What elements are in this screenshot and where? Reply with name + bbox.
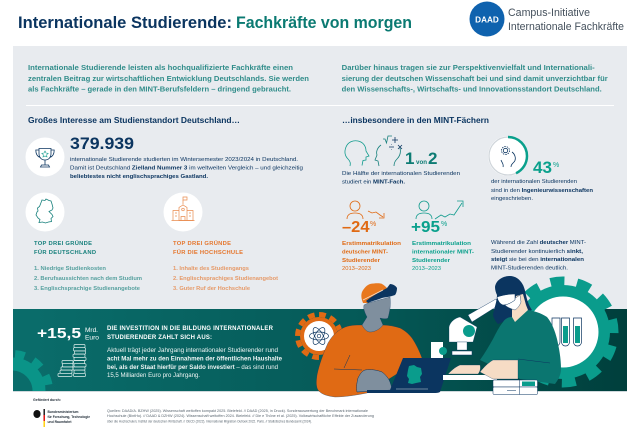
text: sources bbox=[107, 409, 374, 424]
stat: 1 von 2: von bbox=[416, 159, 427, 166]
text: sources: Quellen: DAAD/A. BZHW (2025). Wissenschaft weltoffen kompakt 2025. Bielefeld. // DAAD (2025, in Druck). Sonderauswertung der Benchmark internationale bbox=[107, 409, 368, 413]
stat: 379.939 bbox=[70, 135, 303, 180]
stat: plus 15.5 billion: Mrd. bbox=[85, 327, 98, 334]
illustration: man with laptop bbox=[316, 283, 451, 397]
stat: 379.939: 379.939 bbox=[70, 135, 134, 153]
DAAD logo: Campus-Initiative bbox=[508, 7, 590, 19]
text: international first-year students: Erstimmatrikulation bbox=[412, 241, 472, 247]
text: investment body: 15,5 Milliarden Euro pro Jahrgang. bbox=[107, 373, 200, 379]
text: top reasons for the university: FÜR DIE HOCHSCHULE bbox=[173, 249, 243, 256]
text: German first-year students bbox=[342, 241, 402, 272]
stat: 1 von 2: 1 bbox=[405, 149, 414, 168]
intro text right bbox=[342, 63, 608, 94]
text: investment body: Aktuell trägt jeder Jahrgang internationaler Studierender rund bbox=[107, 348, 278, 354]
text: sources: Hochschule (BintHo). // DAAD & DZHW (2024). Wissenschaft weltoffen 2024. Bielefeld. // Die e Thöne et al. (2025). Volkswirtschaftliche Effekte der Zuwanderung bbox=[107, 414, 374, 418]
text: investment heading: STUDIERENDER ZAHLT SICH AUS: bbox=[107, 335, 212, 341]
text: international first-year students: Studierender bbox=[412, 258, 451, 264]
stat: 1 von 2 bbox=[405, 149, 437, 168]
intro text right: sierung der deutschen Wissenschaft bei und sind damit unverzichtbar für bbox=[342, 74, 608, 83]
text: trend summary: Studierender kontinuierlich sinkt, bbox=[491, 249, 583, 255]
icon: person with falling trend bbox=[347, 201, 384, 219]
illustration: woman at microscope bbox=[443, 276, 561, 384]
text: top reasons for Germany: 1. Niedrige Studienkosten bbox=[34, 266, 106, 272]
stat: plus 95 percent: +95 bbox=[411, 219, 440, 236]
stat: 379.939: beliebtestes nicht englischsprachiges Gastland. bbox=[70, 174, 208, 180]
icon: stacks of books bbox=[58, 344, 86, 376]
intro text left: als Fachkräfte – gerade in den MINT-Berufsfeldern – dringend gebraucht. bbox=[28, 84, 291, 94]
logo: federal ministry: Bundesministerium bbox=[48, 410, 79, 414]
icon: microscope bbox=[431, 299, 499, 358]
DAAD logo bbox=[470, 2, 624, 36]
text: top reasons for Germany: FÜR DEUTSCHLAND bbox=[34, 249, 96, 256]
stat: 43 percent: 43 bbox=[533, 159, 552, 177]
icon: trophy bbox=[26, 138, 64, 176]
text: trend summary: steigt sie bei den internationalen bbox=[491, 257, 585, 263]
stat: 379.939: internationale Studierende studierten im Wintersemester 2023/2024 in Deutschland. bbox=[70, 157, 298, 163]
text: half of students bbox=[342, 171, 460, 186]
text: investment heading: DIE INVESTITION IN DIE BILDUNG INTERNATIONALER bbox=[107, 326, 274, 332]
logo: federal ministry bbox=[33, 409, 90, 427]
title bbox=[18, 14, 412, 32]
text: trend summary bbox=[491, 240, 586, 272]
text: investment body: acht Mal mehr zu den Einnahmen der öffentlichen Haushalte bbox=[107, 356, 283, 362]
stat: 43 percent bbox=[533, 159, 559, 177]
title: Fachkräfte von morgen bbox=[236, 14, 412, 32]
panel: investment band bbox=[13, 309, 627, 392]
stat: minus 24 percent: % bbox=[370, 221, 376, 228]
DAAD logo: DAAD bbox=[475, 15, 499, 24]
heading: left column: Großes Interesse am Studienstandort Deutschland… bbox=[28, 116, 240, 125]
text: German first-year students: Erstimmatrikulation bbox=[342, 241, 402, 247]
stat: 1 von 2: 2 bbox=[428, 149, 437, 168]
stat: minus 24 percent: –24 bbox=[342, 219, 370, 236]
heading: right column: …insbesondere in den MINT-Fächern bbox=[342, 116, 489, 125]
panel: background bbox=[13, 46, 627, 309]
text: international first-year students bbox=[412, 241, 474, 272]
stat: plus 95 percent: % bbox=[441, 221, 447, 228]
text: half of students: Die Hälfte der internationalen Studierenden bbox=[342, 171, 460, 177]
icon: orange gear with atom bbox=[298, 314, 340, 358]
text: investment heading bbox=[107, 326, 274, 341]
logo: federal ministry: und Raumfahrt bbox=[48, 420, 72, 424]
text: trend summary: MINT-Studierenden deutlich. bbox=[491, 266, 568, 272]
text: top reasons for the university: 1. Inhalte des Studiengangs bbox=[173, 266, 249, 272]
icon: university building bbox=[164, 192, 202, 232]
intro text left bbox=[28, 63, 310, 94]
text: top reasons for Germany: 3. Englischsprachige Studienangebote bbox=[34, 286, 141, 292]
text: top reasons for Germany bbox=[34, 240, 142, 292]
text: international first-year students: internationaler MINT- bbox=[412, 250, 474, 256]
text: German first-year students: 2013–2023 bbox=[342, 266, 371, 272]
title: Internationale Studierende: bbox=[18, 14, 232, 32]
stat: 43 percent: % bbox=[553, 162, 559, 169]
text: top reasons for Germany: TOP DREI GRÜNDE bbox=[34, 240, 92, 247]
chart: donut 43 percent bbox=[488, 136, 528, 176]
text: top reasons for the university bbox=[173, 240, 278, 292]
intro text left: Internationale Studierende leisten als hochqualifizierte Fachkräfte einen bbox=[28, 63, 294, 72]
text: top reasons for Germany: 2. Berufsaussichten nach dem Studium bbox=[34, 276, 142, 282]
intro text right: Darüber hinaus tragen sie zur Perspektivenvielfalt und Internationali- bbox=[342, 63, 595, 72]
text: funded by: Gefördert durch: bbox=[33, 398, 61, 402]
intro text right: den Wissenschafts-, Wirtschafts- und Innovationsstandort Deutschland. bbox=[342, 84, 602, 94]
icon: Germany outline bbox=[26, 192, 64, 232]
icon: person with rising trend bbox=[416, 201, 463, 219]
intro text left: zentralen Beitrag zur wirtschaftlichen Entwicklung Deutschlands. Sie werden bbox=[28, 74, 310, 83]
text: half of students: studiert ein MINT-Fach. bbox=[342, 180, 405, 186]
text: trend summary: Während die Zahl deutscher MINT- bbox=[491, 240, 586, 246]
text: top reasons for the university: 2. Englischsprachiges Studienangebot bbox=[173, 276, 278, 282]
DAAD logo: Internationale Fachkräfte bbox=[508, 21, 624, 33]
text: top reasons for the university: 3. Guter Ruf der Hochschule bbox=[173, 286, 251, 292]
stat: plus 15.5 billion: +15,5 bbox=[37, 325, 81, 342]
text: German first-year students: deutscher MINT- bbox=[342, 250, 388, 256]
icon: large gear with test tubes bbox=[501, 270, 625, 394]
text: international first-year students: 2013–2023 bbox=[412, 266, 441, 272]
text: engineering share: eingeschrieben. bbox=[491, 196, 533, 202]
text: investment body: bei, als der Staat hierfür per Saldo investiert – das sind rund bbox=[107, 365, 278, 371]
text: engineering share bbox=[491, 179, 594, 202]
text: top reasons for the university: TOP DREI GRÜNDE bbox=[173, 240, 231, 247]
stat: plus 15.5 billion: Euro bbox=[85, 334, 100, 342]
stat: plus 15.5 billion bbox=[37, 325, 100, 342]
text: sources: über die Hochschulen; Institut der deutschen Wirtschaft. // OECD (2022). International Migration Outlook 2022. Paris. // Statistisches Bundesamt (2024). bbox=[107, 420, 312, 424]
icon: two heads bbox=[345, 136, 402, 166]
icon: books on the desk bbox=[493, 380, 538, 394]
stat: 379.939: Damit ist Deutschland Zielland Nummer 3 im weltweiten Vergleich – und gleichzeitig bbox=[70, 166, 303, 172]
text: engineering share: der internationalen Studierenden bbox=[491, 179, 577, 185]
text: German first-year students: Studierender bbox=[342, 258, 381, 264]
text: investment body bbox=[107, 348, 283, 379]
text: engineering share: sind in den Ingenieurwissenschaften bbox=[491, 188, 594, 194]
logo: federal ministry: für Forschung, Technologie bbox=[48, 415, 90, 419]
